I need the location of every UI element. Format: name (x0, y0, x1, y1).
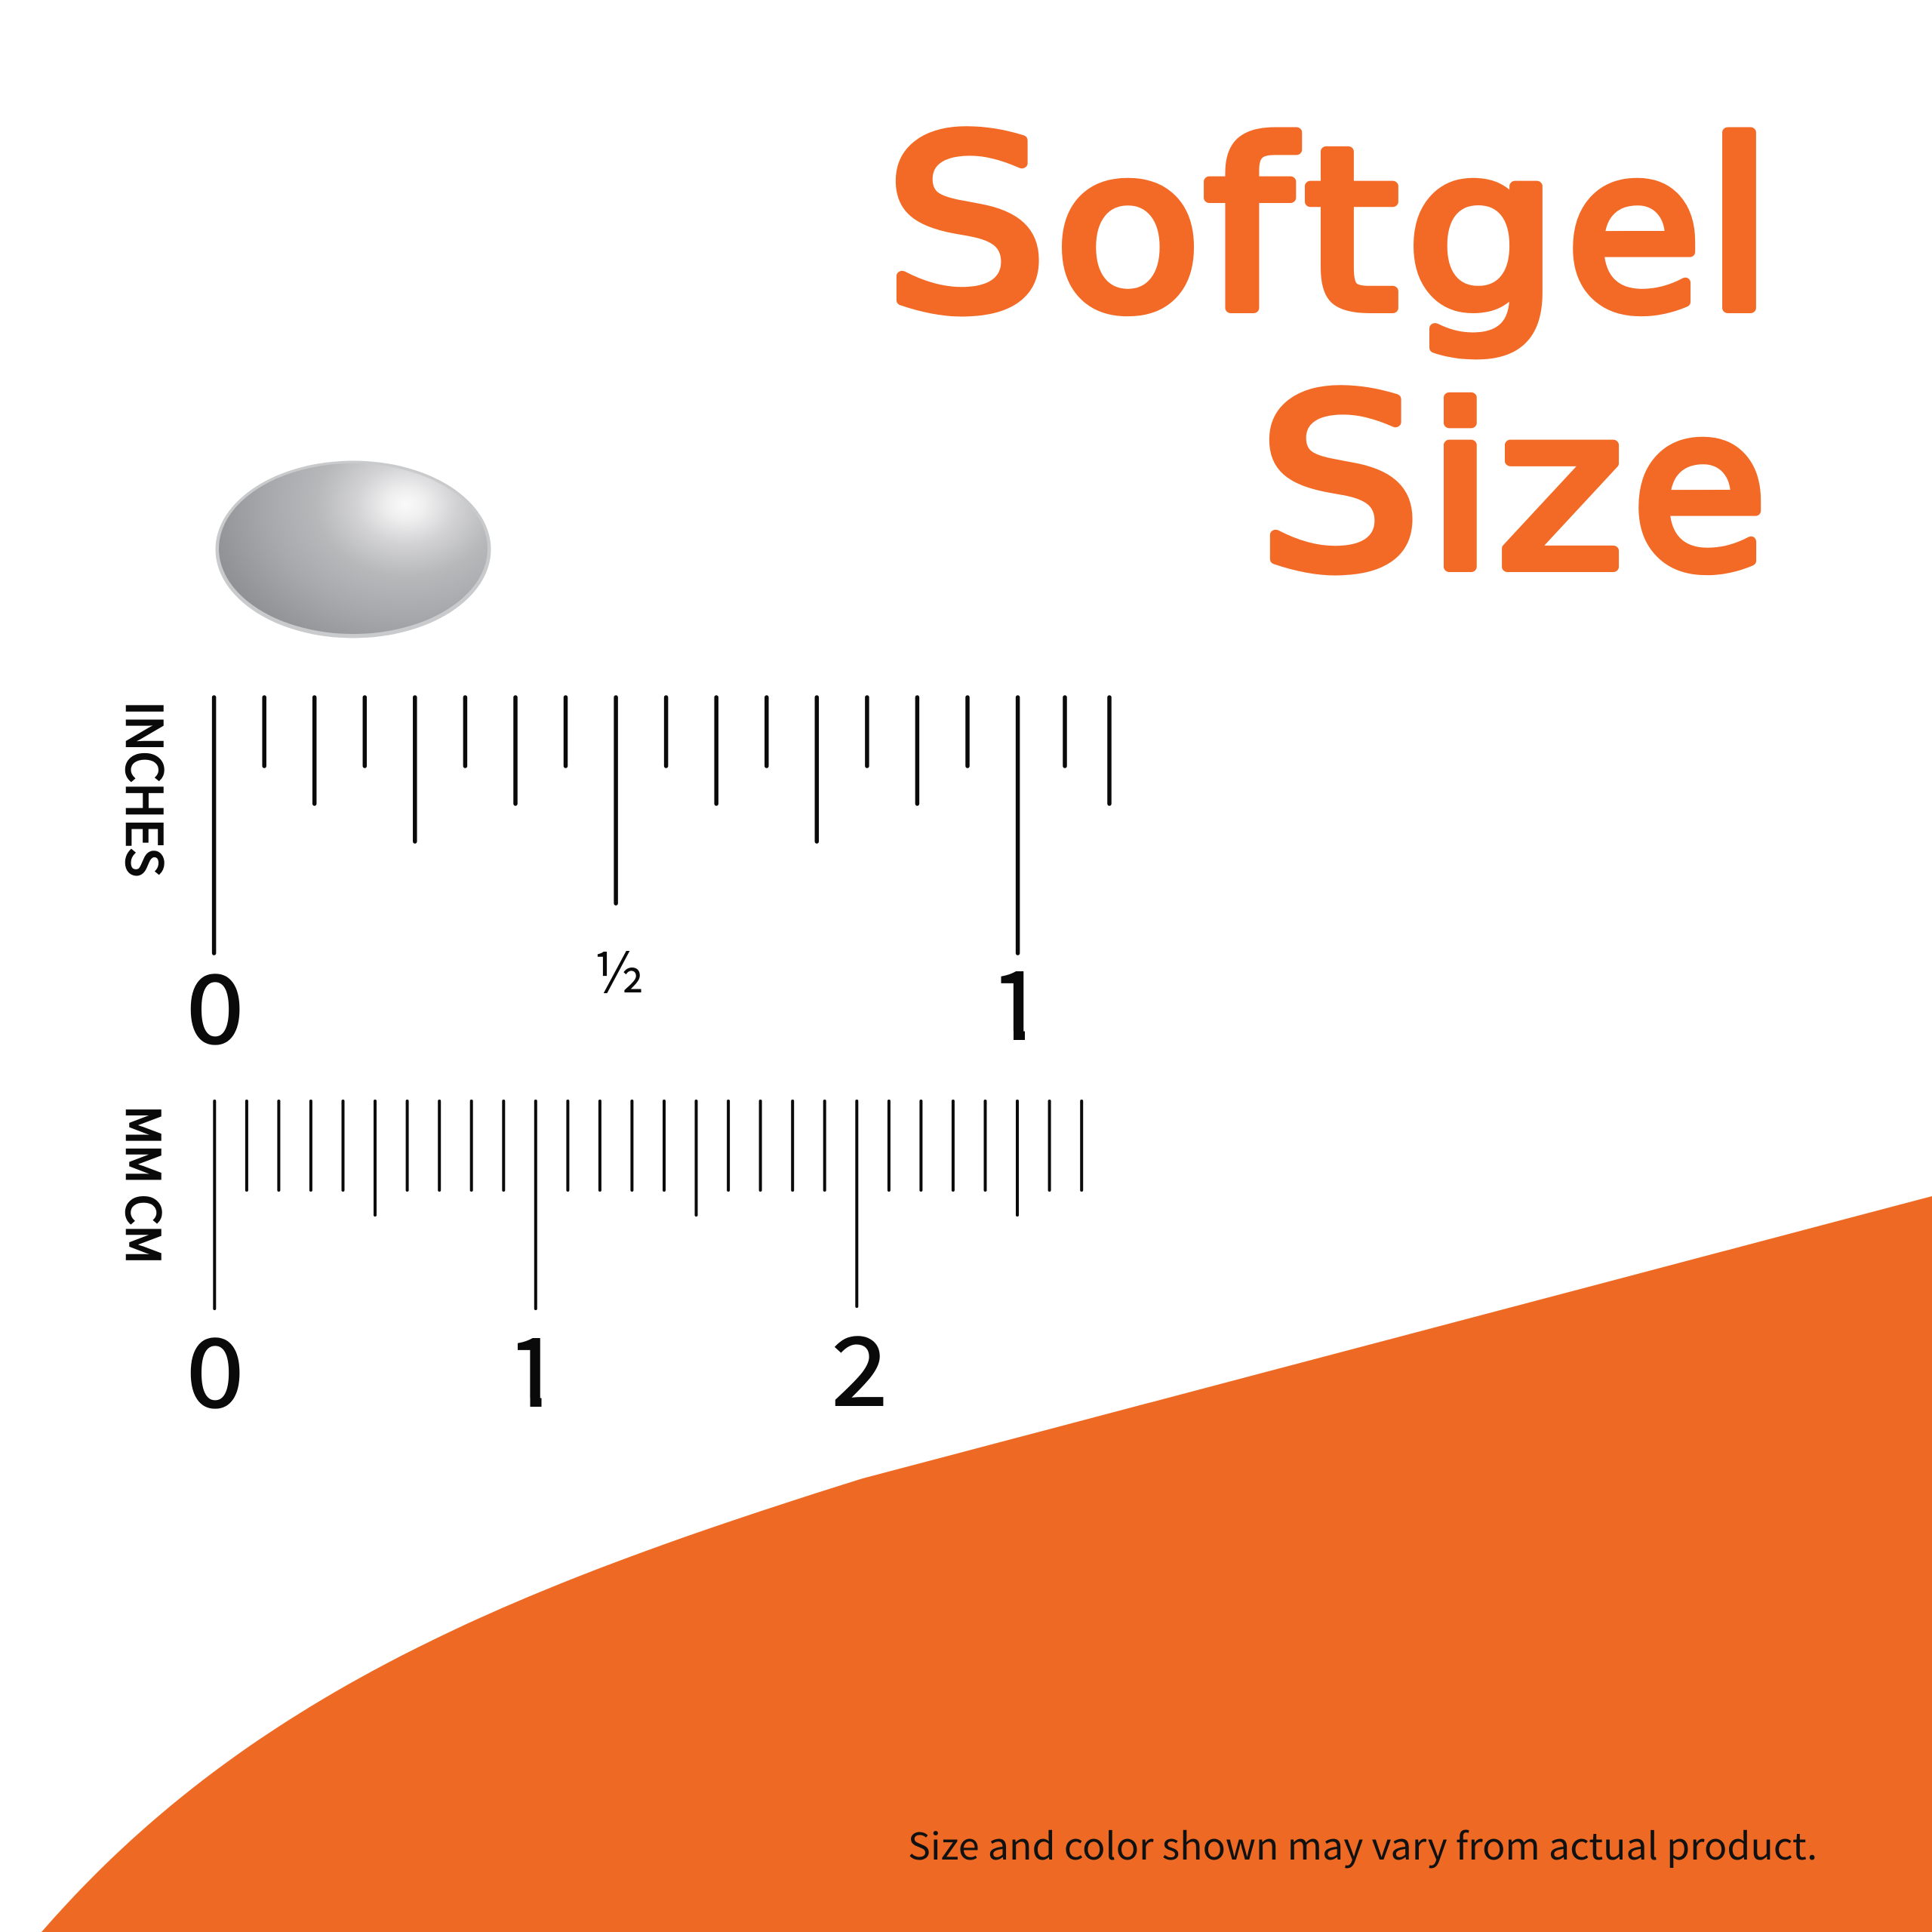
title line 1: S (884, 88, 1048, 365)
title line 2: S (1258, 347, 1421, 623)
title (884, 88, 1774, 623)
title line 1: o (1054, 102, 1201, 361)
title line 1: f (1204, 94, 1297, 363)
title line 1: t (1304, 102, 1398, 361)
centimeter tick marks (214, 1101, 1081, 1309)
inches numeral 1: 1 (990, 930, 1043, 1066)
inches numeral one half: ½ (594, 928, 644, 1009)
inches ruler (112, 697, 1109, 1070)
centimeter numeral 1: 1 (507, 1297, 559, 1433)
title line 1: l (1704, 94, 1774, 363)
orange swoosh background (42, 1196, 1932, 1932)
softgel capsule illustration (216, 460, 491, 638)
title line 2: z (1497, 361, 1623, 620)
mm cm label: MM CM (113, 1106, 180, 1264)
disclaimer text: Size and color shown may vary from actual product. (908, 1817, 1817, 1871)
centimeter numeral 0: 0 (186, 1297, 244, 1434)
centimeters ruler (113, 1101, 1081, 1434)
centimeter numeral 2: 2 (832, 1296, 888, 1432)
inches tick marks (214, 697, 1109, 953)
inches numeral 0: 0 (186, 934, 244, 1070)
title line 1: e (1566, 102, 1702, 361)
title line 2: e (1632, 361, 1767, 620)
title line 2: i (1427, 361, 1494, 620)
title line 1: g (1406, 102, 1558, 361)
inches label: INCHES (112, 701, 183, 877)
